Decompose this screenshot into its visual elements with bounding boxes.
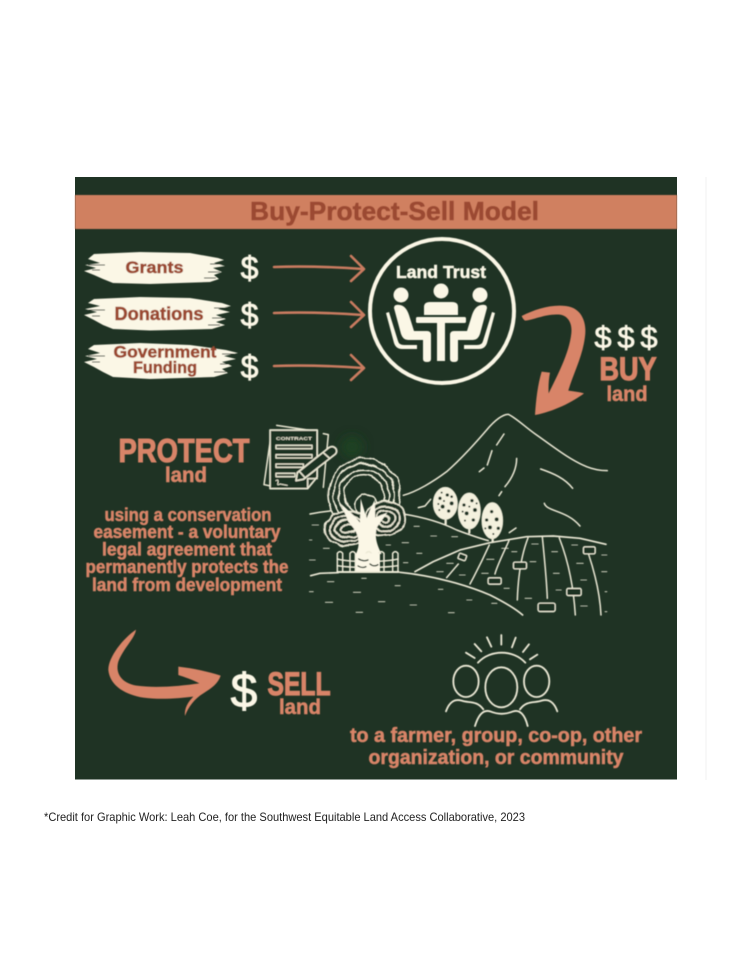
hill line behind tree <box>403 514 488 541</box>
title: Buy-Protect-Sell Model <box>250 196 539 226</box>
funding source: Government Funding <box>84 343 238 379</box>
protect heading: land <box>165 464 207 487</box>
panel: dark green background <box>75 177 677 780</box>
oak trunk and branches <box>341 498 387 554</box>
green blot near pen <box>341 436 363 458</box>
funding source: Donations <box>84 297 231 330</box>
icon: contract with pen <box>264 425 337 489</box>
illustration: landscape <box>309 414 607 615</box>
sell label <box>231 665 330 719</box>
protect heading: PROTECT <box>118 432 250 469</box>
dollar signs for funding: $ <box>241 250 259 286</box>
funding source: Grants: Grants <box>126 258 184 277</box>
sell label: land <box>279 696 321 719</box>
arrow: curved arrow down to buy <box>522 306 585 415</box>
protect description: easement - a voluntary <box>94 522 280 542</box>
dollar signs for buying: $ <box>617 320 635 355</box>
arrow: curved arrow to sell <box>108 630 221 716</box>
protect description: land from development <box>92 575 282 595</box>
buy label: BUY <box>600 351 656 387</box>
funding source: Grants <box>84 252 225 284</box>
dollar signs for funding <box>241 250 259 385</box>
icon: land trust circle with people at table <box>370 239 514 383</box>
title banner <box>75 195 677 229</box>
credit line: *Credit for Graphic Work: Leah Coe, for the Southwest Equitable Land Access Collaborative, 2023 <box>44 810 525 824</box>
mountain ridges <box>418 434 580 533</box>
funding source: Government Funding: Funding <box>133 359 197 377</box>
dollar sign for selling: $ <box>231 665 257 718</box>
arrows to land trust <box>274 256 364 380</box>
field signs <box>458 547 595 612</box>
recipients text: organization, or community <box>368 747 624 769</box>
orchard trees <box>433 487 503 542</box>
field furrows <box>447 537 601 615</box>
protect description: legal agreement that <box>102 540 272 560</box>
fence <box>337 552 398 572</box>
buy label <box>594 320 658 406</box>
dollar signs for buying: $ <box>594 320 612 355</box>
large oak canopy <box>325 459 405 546</box>
buy label: land <box>606 383 648 406</box>
funding source: Government Funding: Government <box>114 344 217 362</box>
field hill <box>415 536 606 572</box>
mountain outline <box>403 414 607 495</box>
panel content <box>75 195 677 769</box>
grass tufts <box>309 525 607 613</box>
foreground hill <box>311 572 523 615</box>
dollar signs for funding: $ <box>241 349 259 385</box>
protect heading <box>118 432 250 487</box>
faint page edge line <box>706 177 707 780</box>
protect description: permanently protects the <box>86 557 288 577</box>
sell label: SELL <box>268 666 330 702</box>
icon: contract with pen: CONTRACT <box>276 436 312 442</box>
dollar signs for buying <box>594 320 658 355</box>
funding source: Donations: Donations <box>114 304 204 324</box>
protect description <box>86 505 288 595</box>
recipients text <box>350 725 642 769</box>
recipients text: to a farmer, group, co-op, other <box>350 725 642 747</box>
dollar signs for funding: $ <box>241 297 259 333</box>
land trust label: Land Trust <box>396 262 486 282</box>
dollar signs for buying: $ <box>640 320 658 355</box>
protect description: using a conservation <box>104 505 272 525</box>
icon: community group <box>446 635 557 726</box>
